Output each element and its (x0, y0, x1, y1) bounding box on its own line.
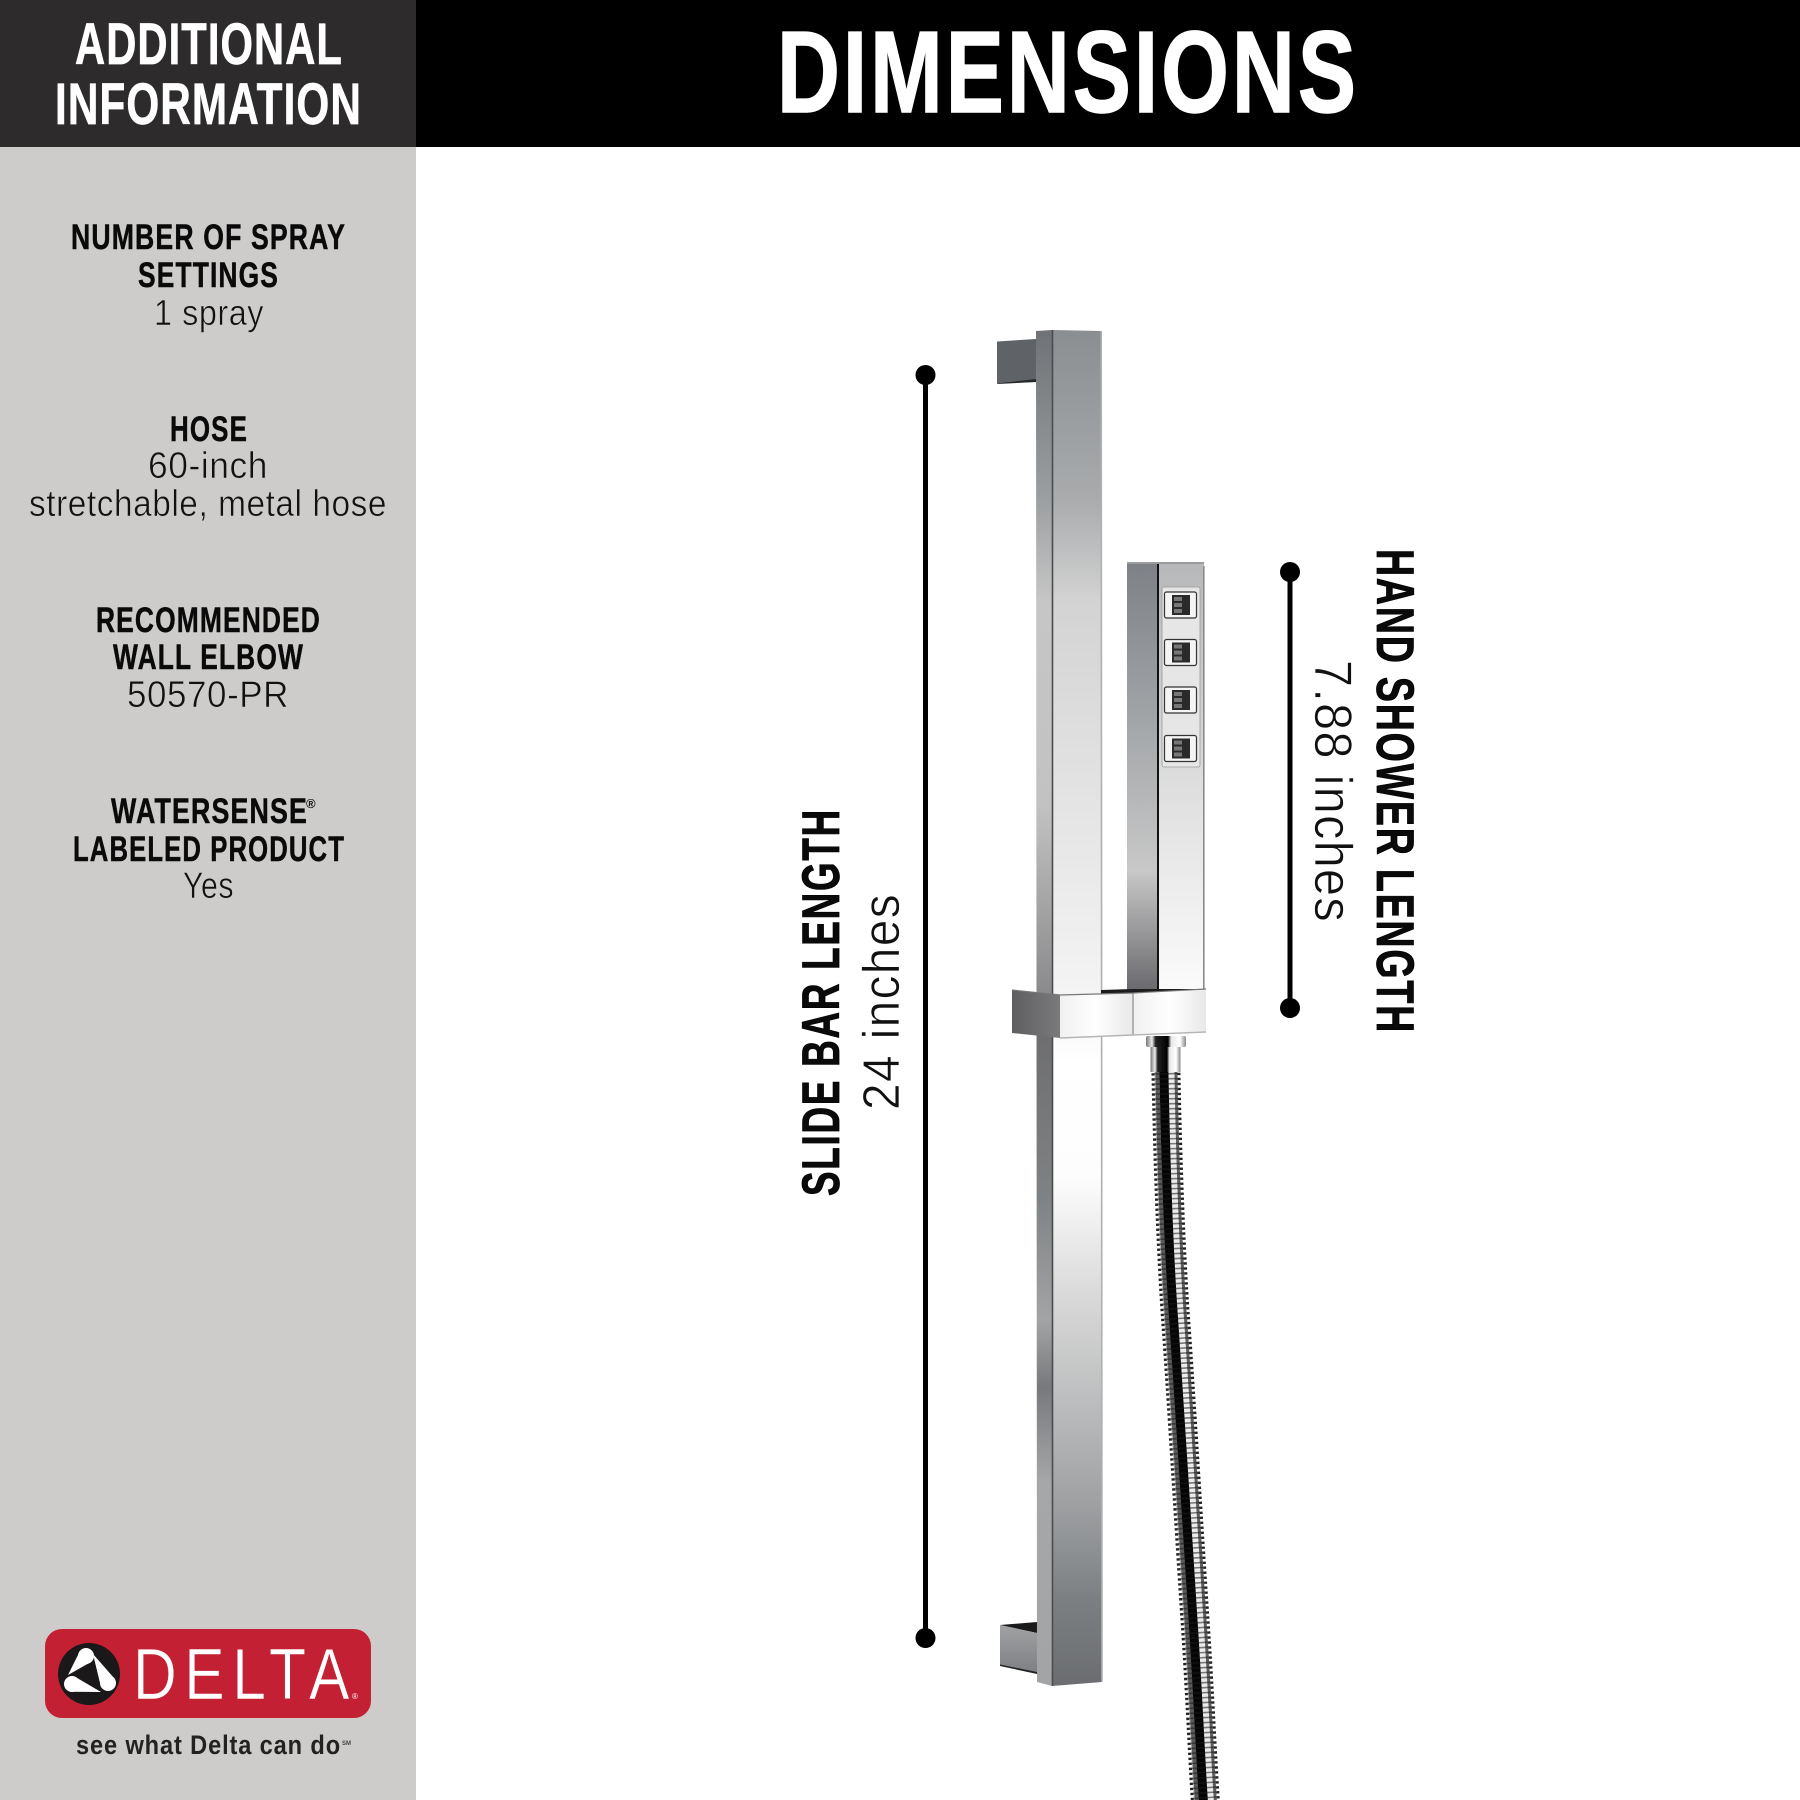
logo: Delta: ® (352, 1692, 358, 1701)
nozzle 4 (1164, 736, 1196, 762)
sidebar header (0, 0, 416, 147)
hand shower (1127, 562, 1205, 990)
icon: Delta emblem (58, 1643, 120, 1705)
spec: recommended wall elbow: 50570-PR (127, 674, 289, 715)
panel: additional information sidebar (0, 0, 416, 1800)
logo: Delta: see what Delta can do (76, 1730, 341, 1760)
spec: watersense labeled product: Yes (183, 865, 234, 906)
spec: number of spray settings: 1 spray (154, 292, 264, 333)
spec: watersense labeled product: ® (306, 796, 316, 811)
spec: recommended wall elbow: RECOMMENDED (96, 601, 321, 640)
spec: recommended wall elbow: WALL ELBOW (113, 638, 304, 677)
spec: hose: stretchable, metal hose (29, 483, 387, 524)
sidebar header: INFORMATION (55, 72, 362, 137)
hose (1157, 1048, 1216, 1800)
spec: watersense labeled product: WATERSENSE (111, 792, 308, 831)
nozzle 3 (1164, 687, 1196, 713)
spec: number of spray settings: SETTINGS (138, 256, 279, 295)
spray nozzle panel (1162, 587, 1200, 767)
spec: watersense labeled product (73, 792, 345, 906)
spec: hose: 60-inch (148, 445, 268, 486)
spec: number of spray settings: NUMBER OF SPRAY (71, 218, 346, 257)
hose connector (1146, 1036, 1186, 1072)
spec: hose (29, 410, 387, 524)
top bracket (997, 339, 1036, 384)
nozzle 1 (1164, 592, 1196, 618)
dimension: hand shower length (1280, 549, 1424, 1034)
spec: hose: HOSE (170, 410, 248, 449)
logo: Delta: SM (342, 1741, 351, 1747)
slide bar rail (1036, 330, 1102, 1686)
logo: Delta: DELTA (133, 1635, 357, 1715)
value: 7.88 inches: 7.88 inches (1303, 660, 1362, 923)
bottom bracket (1000, 1622, 1037, 1674)
spec: watersense labeled product: LABELED PRODUCT (73, 830, 345, 869)
nozzle 2 (1164, 640, 1196, 666)
logo: Delta (45, 1629, 371, 1760)
title bar: dimensions: DIMENSIONS (777, 7, 1359, 137)
title bar: dimensions (416, 0, 1800, 147)
dimension line: slide bar (916, 365, 936, 1648)
dimension: slide bar length (792, 365, 936, 1648)
sidebar header: ADDITIONAL (75, 12, 343, 77)
product: slide bar with hand shower (997, 330, 1216, 1800)
label: hand shower length: HAND SHOWER LENGTH (1365, 549, 1424, 1034)
sliding clamp (1012, 989, 1206, 1038)
spec: recommended wall elbow (96, 601, 321, 715)
spec: number of spray settings (71, 218, 346, 333)
label: slide bar length: SLIDE BAR LENGTH (792, 808, 851, 1196)
value: 24 inches: 24 inches (853, 893, 911, 1110)
sidebar background (0, 147, 416, 1800)
dimension line: hand shower (1280, 562, 1300, 1018)
